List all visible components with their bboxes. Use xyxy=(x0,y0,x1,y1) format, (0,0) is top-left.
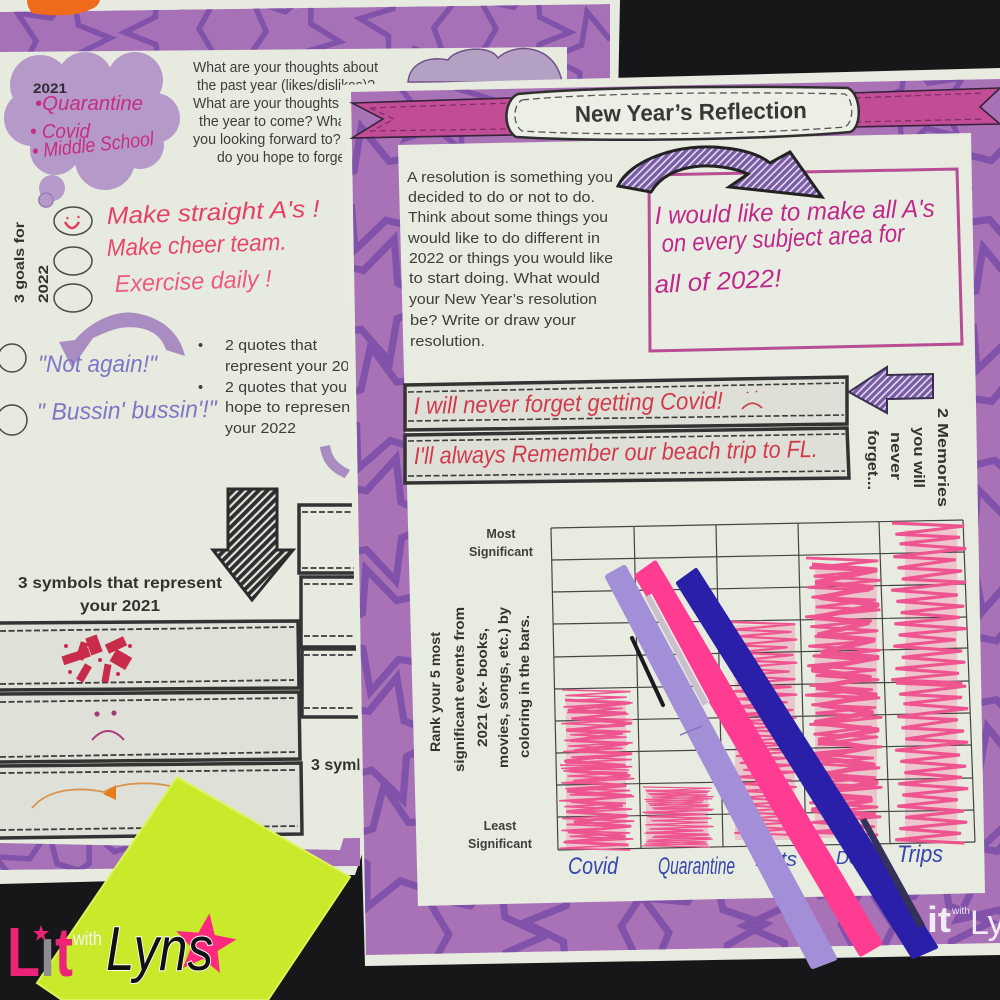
right strip dashed lines xyxy=(302,512,355,708)
resolution instructions: decided to do or not to do. xyxy=(408,190,595,206)
bar scribble: Quarantine xyxy=(643,787,713,847)
left hatched arrow xyxy=(849,367,933,413)
faint page logo: with xyxy=(951,906,970,917)
handwritten goals: Make cheer team. xyxy=(106,229,287,262)
rank instructions: Rank your 5 most xyxy=(428,631,443,752)
curved hatched arrow xyxy=(618,147,822,197)
heading: 3 goals: 2022 xyxy=(35,265,51,303)
logo word: Lit: Lıt xyxy=(7,913,73,991)
resolution instructions: resolution. xyxy=(410,334,485,350)
faint page logo: it xyxy=(927,899,951,940)
logo word: with: with xyxy=(72,929,102,950)
hatched down arrow xyxy=(213,489,293,600)
prompt text: thoughts xyxy=(193,60,378,166)
handwritten quotes: "Not again!" xyxy=(38,351,158,378)
logo small star xyxy=(33,925,49,941)
handwritten quotes xyxy=(37,351,218,426)
chart grid xyxy=(551,520,975,850)
quotes instruction text: 2 quotes that xyxy=(225,338,317,354)
prompt text: thoughts: do you hope to forget? xyxy=(217,150,357,166)
bar scribble: fourth event xyxy=(806,558,882,835)
axis label: most significant: Significant xyxy=(469,545,534,559)
handwritten goals: Make straight A's ! xyxy=(106,196,320,230)
bar scribble: Trips xyxy=(892,523,967,843)
heading: 2 memories xyxy=(864,408,951,507)
bar labels: Pets xyxy=(755,849,797,871)
memory 1 handwriting: I will never forget getting Covid! xyxy=(414,388,723,420)
back page paper xyxy=(0,0,620,884)
front paper xyxy=(340,68,1000,966)
resolution instructions: 2022 or things you would like xyxy=(409,251,613,267)
quotes instruction text: your 2022 xyxy=(225,421,296,437)
rank instructions: significant events from xyxy=(452,607,467,772)
front white panel xyxy=(398,133,985,906)
bar labels: Quarantine xyxy=(658,853,735,880)
heading: 3 symbols: 3 symbols that represent xyxy=(18,575,223,592)
prompt text: thoughts: What are your thoughts about xyxy=(193,60,378,76)
title: New Year’s Reflection xyxy=(575,97,807,127)
bubble handwriting xyxy=(30,93,155,163)
prompt text: thoughts: the year to come? What are xyxy=(199,114,374,130)
bar scribble: Covid xyxy=(560,690,634,850)
memory strip 1 xyxy=(405,377,847,430)
back page purple border xyxy=(0,4,610,870)
axis label: most significant: Most xyxy=(486,527,516,541)
heading: 3 symbols xyxy=(18,575,223,615)
quotes instruction text: hope to represent xyxy=(225,400,355,416)
back page white panel xyxy=(0,47,567,850)
axis label: least significant xyxy=(468,819,533,851)
goal checkboxes xyxy=(54,207,92,312)
bar labels: Dogs xyxy=(836,848,878,868)
memory strip 2 xyxy=(405,428,849,483)
prompt text: thoughts: you looking forward to? What xyxy=(193,132,378,148)
heading: 2 memories: forget... xyxy=(864,430,881,490)
ranking bar chart xyxy=(551,520,975,850)
sticky note xyxy=(37,777,350,1000)
icon: lavender pen xyxy=(608,568,834,966)
bubble year label: 2021 xyxy=(33,81,68,96)
icon: blue pen xyxy=(678,570,936,957)
quotes instruction text xyxy=(198,338,367,437)
resolution handwriting: I would like to make all A's xyxy=(654,195,935,230)
prompt text: thoughts: the past year (likes/dislikes)? xyxy=(197,78,375,94)
symbol: sad face xyxy=(92,711,124,740)
pink ribbon left xyxy=(352,98,512,138)
symbol: red burst xyxy=(61,634,132,683)
quotes instruction text: • xyxy=(198,338,203,354)
decorative cloud top right of back page xyxy=(408,49,562,82)
bubble handwriting: •Quarantine xyxy=(35,93,143,115)
icon: pink pen xyxy=(637,563,880,954)
bar labels xyxy=(568,841,943,880)
bar labels: Covid xyxy=(568,853,619,880)
rank instructions xyxy=(428,606,532,772)
resolution instructions: be? Write or draw your xyxy=(410,313,576,329)
resolution instructions: to start doing. What would xyxy=(409,271,600,287)
bar labels: Trips xyxy=(897,841,943,868)
title plaque xyxy=(506,87,859,140)
handwritten goals xyxy=(106,196,320,298)
heading: 3 goals xyxy=(11,221,51,303)
resolution handwriting: all of 2022! xyxy=(654,264,782,299)
bubble handwriting: • Covid xyxy=(30,121,91,143)
resolution box xyxy=(649,169,962,351)
bar scribble: third event xyxy=(730,622,798,835)
orange clip xyxy=(27,0,100,15)
bar fills xyxy=(566,530,957,848)
rank instructions: movies, songs, etc.) by xyxy=(496,606,511,768)
logo: Lit with Lyns xyxy=(7,913,236,991)
bubble handwriting: • Middle School xyxy=(31,128,155,163)
curved arrow to quotes xyxy=(59,313,185,368)
heading fragment: 3 symbols: 3 symbols xyxy=(311,757,389,774)
quotes instruction text: represent your 2021 xyxy=(225,359,367,375)
memory 2 handwriting: I'll always Remember our beach trip to FL. xyxy=(414,436,818,470)
resolution instructions: would like to do different in xyxy=(407,231,600,247)
resolution instructions: your New Year’s resolution xyxy=(409,292,597,308)
heading: 2 memories: you will xyxy=(910,427,927,488)
rank instructions: 2021 (ex- books, xyxy=(475,628,490,747)
resolution handwriting: on every subject area for xyxy=(661,219,906,258)
resolution handwriting xyxy=(654,195,935,299)
heading: 3 symbols: your 2021 xyxy=(80,598,160,615)
quote checkboxes xyxy=(0,344,27,435)
logo star xyxy=(176,913,236,973)
panel: back worksheet xyxy=(0,0,620,884)
rank instructions: coloring in the bars. xyxy=(517,615,532,758)
handwritten quotes: " Bussin' bussin'!" xyxy=(37,396,218,426)
logo word: Lyns: Lyns xyxy=(106,915,213,984)
quotes instruction text: • xyxy=(198,380,203,396)
thought bubble 2021 xyxy=(4,52,180,208)
strip dashed lines xyxy=(0,627,298,830)
heading: 2 memories: never xyxy=(887,432,904,480)
axis label: least significant: Least xyxy=(484,819,517,833)
prompt text: thoughts: What are your thoughts about xyxy=(193,96,378,112)
pink ribbon right xyxy=(850,88,1000,127)
symbol strips xyxy=(0,621,302,838)
icon: dark clip behind lavender pen xyxy=(632,638,663,705)
symbol: orange arrow xyxy=(32,783,170,808)
faint page logo xyxy=(927,899,1000,942)
resolution instructions: A resolution is something you xyxy=(407,170,613,186)
heading: 3 goals: 3 goals for xyxy=(11,221,27,303)
resolution instructions: Think about some things you xyxy=(408,210,608,226)
handwritten goals: Exercise daily ! xyxy=(114,266,272,298)
purple star border xyxy=(351,79,1000,955)
resolution instructions xyxy=(407,170,613,350)
right strip stack xyxy=(299,505,362,717)
purple arc fragment xyxy=(320,445,350,478)
axis label: least significant: Significant xyxy=(468,837,533,851)
sad face doodle xyxy=(742,391,762,409)
heading: 2 memories: 2 Memories xyxy=(934,408,951,507)
quotes instruction text: 2 quotes that you xyxy=(225,380,347,396)
axis label: most significant xyxy=(469,527,534,559)
panel: front worksheet xyxy=(340,68,1000,966)
